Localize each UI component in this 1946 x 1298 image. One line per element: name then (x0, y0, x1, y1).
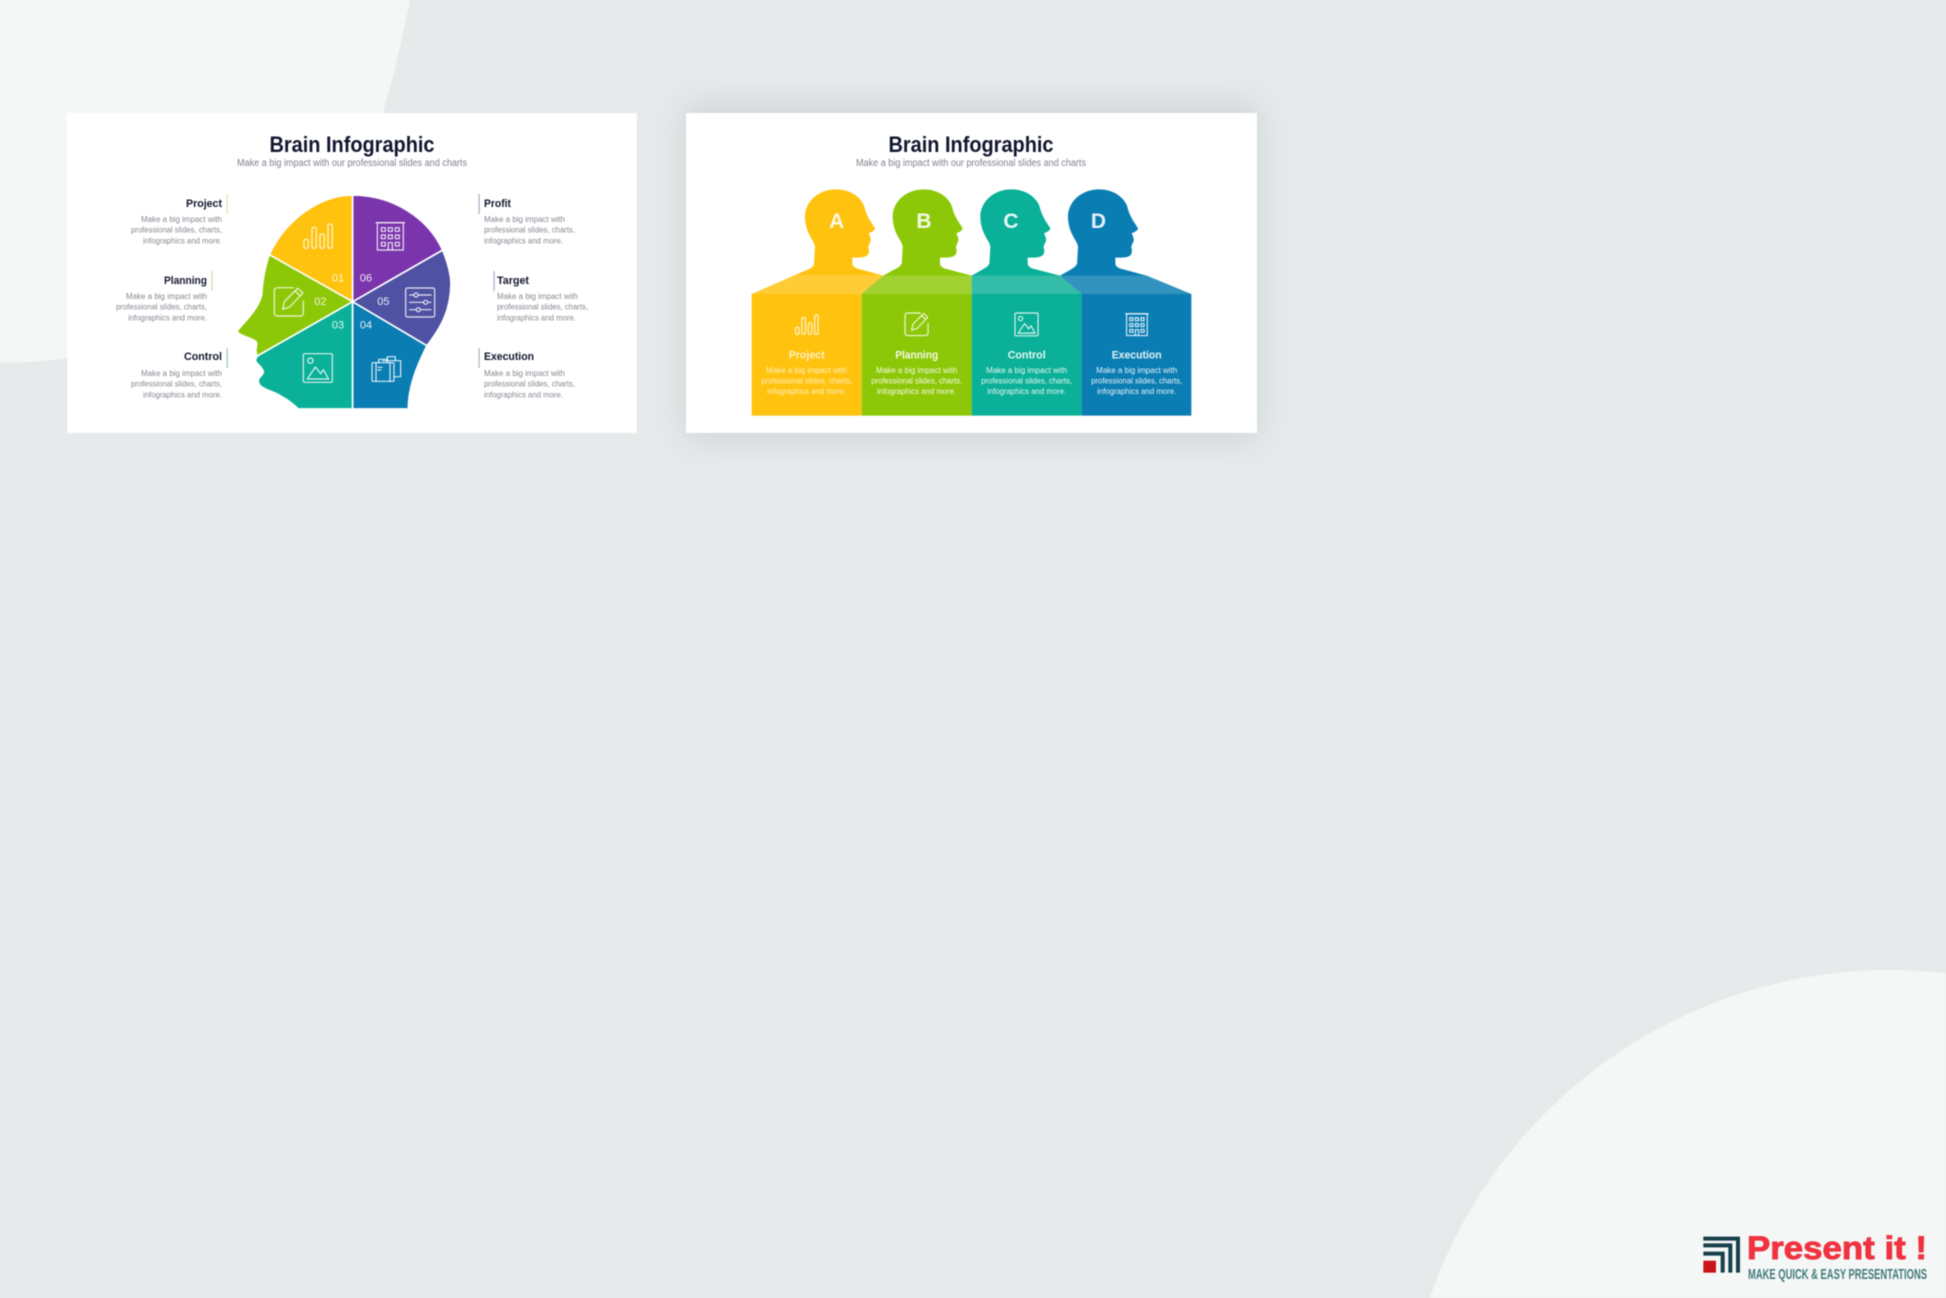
figure B green (862, 189, 972, 416)
sector 01 yellow (269, 195, 353, 302)
callout: Control: Control (184, 351, 222, 363)
column text: Execution: infographics and more. (1097, 387, 1176, 396)
column text: Planning: infographics and more. (877, 387, 956, 396)
logo: Present it (1703, 1230, 1927, 1283)
figure C teal (972, 189, 1082, 416)
icon: bars (796, 315, 818, 334)
sector 04 blue (353, 302, 427, 409)
callout: Execution: Make a big impact with (484, 369, 565, 378)
callout: Execution: Execution (484, 351, 534, 363)
callout: Execution (478, 348, 575, 399)
callout: Project: infographics and more. (143, 236, 222, 245)
callout: Control: infographics and more. (143, 390, 222, 399)
icon: image (1015, 313, 1038, 336)
column text: Planning (871, 350, 962, 396)
callout: Target: infographics and more. (497, 313, 576, 322)
icon: building (376, 223, 405, 250)
column text: Control (981, 350, 1072, 396)
column text: Control: Control (1008, 350, 1046, 362)
column text: Control: Make a big impact with (986, 366, 1067, 375)
callout: Planning: professional slides, charts, (116, 303, 207, 312)
icon: sliders (406, 288, 435, 317)
figure D blue (1060, 189, 1191, 416)
icon: suitcase (372, 357, 401, 381)
callout: Execution: professional slides, charts, (484, 380, 575, 389)
callout: Project: professional slides, charts, (131, 226, 222, 235)
background circle top left (0, 0, 410, 363)
slide 2 subtitle: Make a big impact with our professional slides and charts (856, 158, 1086, 169)
head letters (829, 210, 1106, 233)
sector numbers: 01 (332, 272, 344, 284)
slide 1 subtitle: Make a big impact with our professional slides and charts (237, 158, 467, 169)
column text: Project: Project (789, 350, 825, 362)
callout: Planning: Make a big impact with (126, 292, 207, 301)
icon: image (303, 354, 332, 382)
column text: Project: professional slides, charts, (761, 376, 852, 386)
callout: Profit: Profit (484, 198, 511, 210)
column text: Control: professional slides, charts, (981, 376, 1072, 386)
callout: Profit: professional slides, charts, (484, 226, 575, 235)
head letters: D (1091, 210, 1106, 233)
icon: building (1126, 314, 1148, 336)
column text: Project: infographics and more. (767, 387, 846, 396)
callout: Profit: Make a big impact with (484, 215, 565, 224)
sector numbers: 06 (360, 272, 372, 284)
callout: Target: professional slides, charts, (497, 303, 588, 312)
slide 2: head columns infographic (686, 113, 1257, 433)
callout: Profit (478, 194, 575, 245)
slide 1 title: Brain Infographic (270, 132, 434, 157)
callout: Planning: infographics and more. (128, 313, 207, 322)
sector 06 purple (353, 195, 443, 302)
head letters: C (1003, 210, 1019, 233)
column text: Project (761, 350, 852, 396)
callout: Control (131, 348, 228, 399)
column text: Planning: Make a big impact with (876, 366, 957, 375)
head letters: B (916, 210, 932, 233)
callout: Execution: infographics and more. (484, 390, 563, 399)
figures (752, 189, 1191, 416)
head letters: A (829, 210, 844, 233)
callout: Planning (116, 271, 213, 322)
slide 2 title: Brain Infographic (888, 132, 1054, 157)
sector numbers (314, 272, 389, 332)
icon: pencil (274, 288, 303, 316)
sector numbers: 02 (314, 296, 326, 308)
background circle bottom right (1430, 970, 1946, 1298)
logo wordmark: Present it ! (1747, 1230, 1927, 1266)
column text: Planning: professional slides, charts, (871, 376, 962, 386)
column text: Project: Make a big impact with (766, 366, 847, 375)
slide 2 shadow (684, 104, 1259, 440)
callout: Project: Make a big impact with (141, 215, 222, 224)
sector numbers: 05 (377, 296, 389, 308)
callout: Planning: Planning (164, 275, 207, 287)
sector 05 indigo (353, 250, 451, 346)
icon: pencil (905, 313, 928, 336)
icon: bars (304, 224, 332, 248)
icon: logo mark (1703, 1239, 1738, 1273)
callout: Target: Make a big impact with (497, 292, 578, 301)
sector numbers: 03 (332, 320, 344, 332)
sector 03 teal (255, 302, 353, 409)
column text: Control: infographics and more. (987, 387, 1066, 396)
column text: Execution: professional slides, charts, (1091, 376, 1182, 386)
callout: Project: Project (186, 198, 222, 210)
callout: Target: Target (497, 275, 529, 287)
callout: Control: Make a big impact with (141, 369, 222, 378)
head pie chart (237, 195, 451, 409)
column text: Execution: Make a big impact with (1096, 366, 1177, 375)
callout: Target (494, 271, 588, 322)
sector 02 green (237, 255, 353, 356)
column text: Execution: Execution (1112, 350, 1162, 362)
figure A yellow (752, 189, 883, 416)
column text: Execution (1091, 350, 1182, 396)
sector numbers: 04 (360, 320, 372, 332)
callout: Profit: infographics and more. (484, 236, 563, 245)
slide 1: head pie infographic (67, 113, 637, 433)
callout: Project (131, 194, 228, 245)
callout: Control: professional slides, charts, (131, 380, 222, 389)
column text: Planning: Planning (895, 350, 938, 362)
